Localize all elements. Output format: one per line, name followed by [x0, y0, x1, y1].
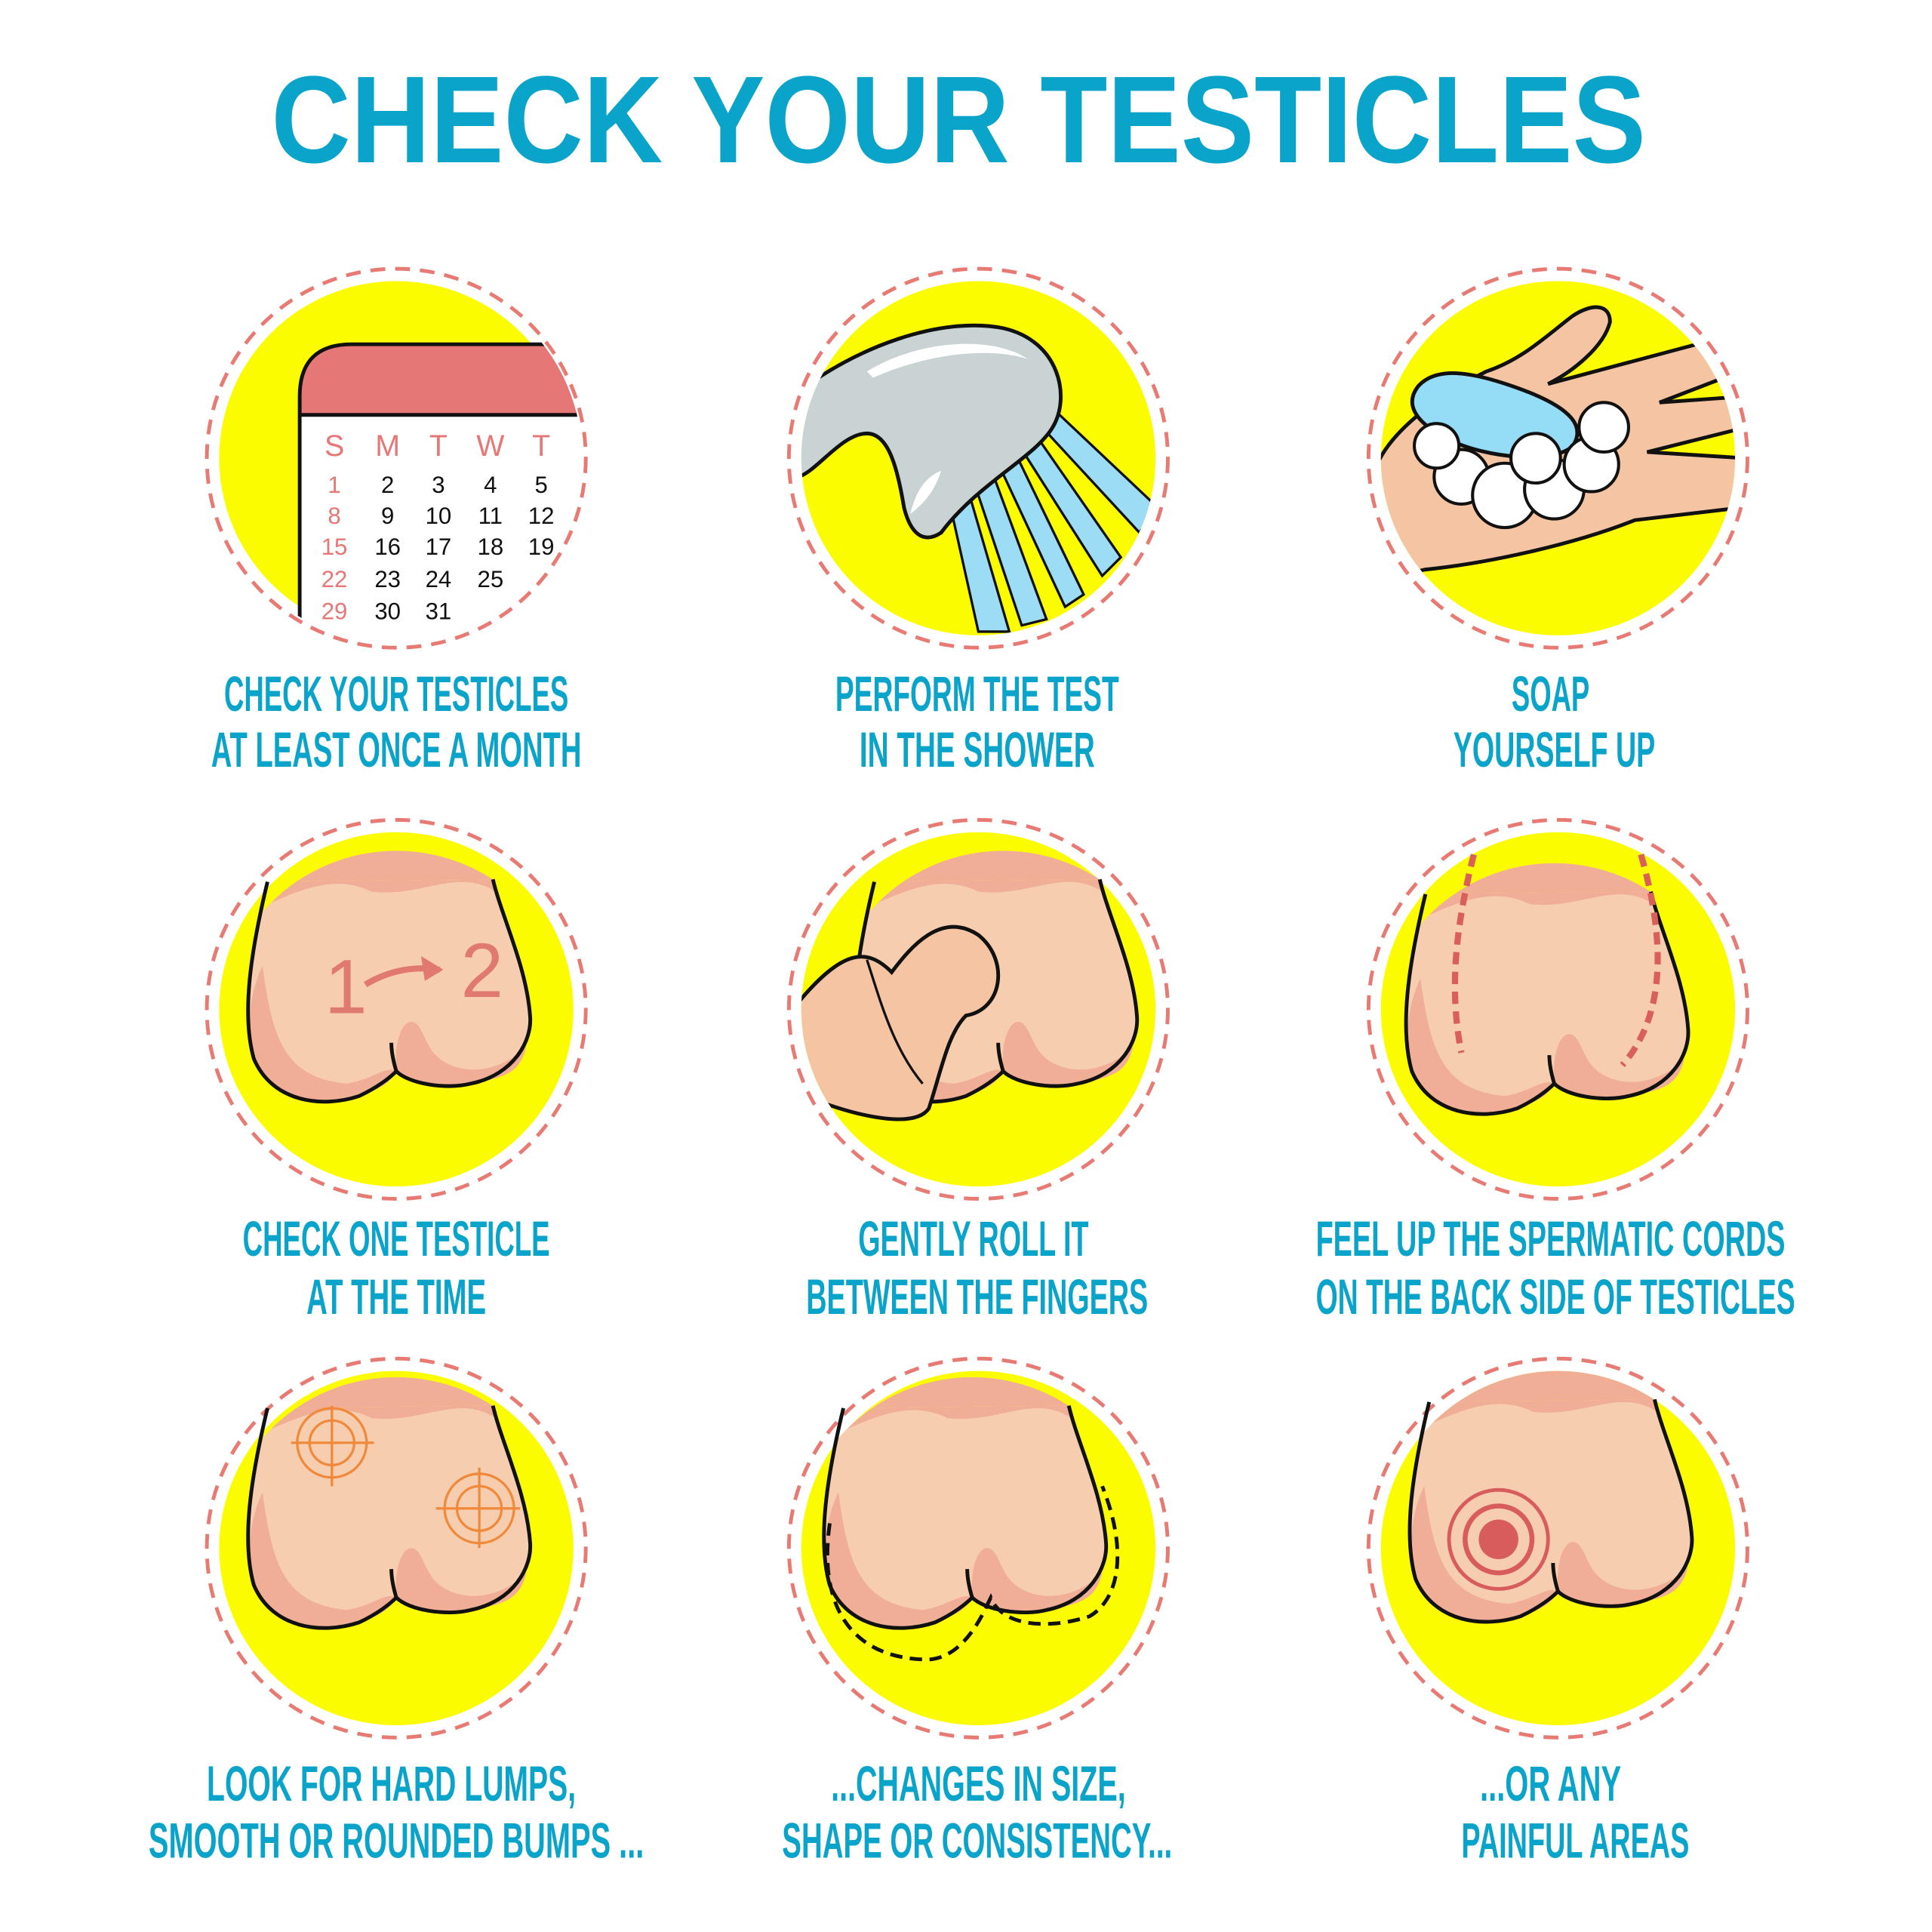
- caption 4: [243, 1211, 550, 1324]
- caption 1: CHECK YOUR TESTICLES: [224, 666, 568, 721]
- caption 7: [149, 1756, 644, 1869]
- icon: calendar: 4: [484, 472, 497, 498]
- icon: calendar: 8: [328, 503, 341, 529]
- icon: dashed cords: [1455, 854, 1658, 1065]
- panel: spermatic cords: [1368, 820, 1747, 1199]
- caption 1: [211, 666, 581, 777]
- icon: calendar: 30: [374, 598, 401, 625]
- caption 5: [806, 1211, 1148, 1324]
- icon: calendar: 10: [426, 503, 451, 529]
- caption 9: [1461, 1756, 1689, 1869]
- icon: calendar: 1: [328, 472, 341, 498]
- caption 9: PAINFUL AREAS: [1461, 1814, 1689, 1869]
- caption 5: BETWEEN THE FINGERS: [806, 1269, 1148, 1324]
- caption 2: IN THE SHOWER: [860, 722, 1095, 777]
- icon: calendar: 9: [381, 503, 394, 529]
- panel: one at a time: [207, 820, 586, 1199]
- caption 6: [1316, 1211, 1795, 1324]
- caption 7: SMOOTH OR ROUNDED BUMPS ...: [149, 1814, 644, 1869]
- icon: calendar: 11: [478, 503, 503, 529]
- panel: calendar: [207, 269, 595, 648]
- caption 8: SHAPE OR CONSISTENCY...: [782, 1814, 1172, 1869]
- icon: calendar: [300, 344, 595, 644]
- icon: 1 to 2 arrow: [325, 928, 503, 1029]
- panel: soap: [1368, 269, 1747, 648]
- icon: calendar: 16: [374, 534, 401, 560]
- icon: 1 to 2 arrow: 2: [460, 928, 503, 1014]
- panel: lumps: [207, 1356, 586, 1737]
- icon: shower head: [792, 325, 1158, 632]
- caption 8: ...CHANGES IN SIZE,: [831, 1756, 1126, 1811]
- caption 9: ...OR ANY: [1480, 1756, 1621, 1811]
- icon: calendar: 17: [426, 534, 451, 560]
- icon: calendar: S: [325, 429, 344, 463]
- icon: calendar: T: [429, 429, 448, 463]
- caption 2: PERFORM THE TEST: [835, 666, 1119, 721]
- caption 5: GENTLY ROLL IT: [858, 1211, 1088, 1266]
- icon: calendar: 5: [534, 472, 548, 498]
- icon: calendar: M: [375, 429, 400, 463]
- caption 2: [835, 666, 1119, 777]
- title: CHECK YOUR TESTICLES: [271, 50, 1646, 189]
- caption 1: AT LEAST ONCE A MONTH: [211, 722, 581, 777]
- icon: fingers: [792, 927, 998, 1119]
- panel: roll: [789, 820, 1189, 1199]
- icon: calendar: 22: [321, 566, 347, 592]
- icon: calendar: 31: [426, 598, 451, 625]
- icon: calendar: 23: [374, 566, 401, 592]
- icon: calendar: 2: [381, 472, 394, 498]
- caption 3: [1454, 666, 1655, 777]
- panel: size changes: [786, 1356, 1168, 1737]
- caption 3: YOURSELF UP: [1454, 722, 1655, 777]
- icon: calendar: 19: [528, 534, 554, 560]
- icon: calendar: 29: [321, 598, 347, 625]
- icon: calendar: 15: [321, 534, 347, 560]
- caption 8: [782, 1756, 1172, 1869]
- caption 4: AT THE TIME: [306, 1269, 486, 1324]
- panel: painful areas: [1368, 1350, 1747, 1737]
- caption 7: LOOK FOR HARD LUMPS,: [207, 1756, 576, 1811]
- icon: dashed enlarged outline: [827, 1486, 1118, 1660]
- icon: calendar: 24: [426, 566, 451, 592]
- icon: calendar: 12: [528, 503, 554, 529]
- icon: calendar: T: [532, 429, 550, 463]
- caption 3: SOAP: [1512, 666, 1589, 721]
- icon: calendar: 25: [478, 566, 503, 592]
- icon: lump targets: [291, 1406, 520, 1548]
- icon: hand with soap: [1375, 307, 1746, 582]
- icon: calendar: W: [476, 429, 505, 463]
- panel: shower: [789, 269, 1168, 648]
- icon: calendar: 18: [478, 534, 503, 560]
- icon: calendar: 3: [432, 472, 445, 498]
- icon: 1 to 2 arrow: 1: [325, 943, 368, 1029]
- icon: pain target: [1449, 1490, 1548, 1589]
- caption 4: CHECK ONE TESTICLE: [243, 1211, 550, 1266]
